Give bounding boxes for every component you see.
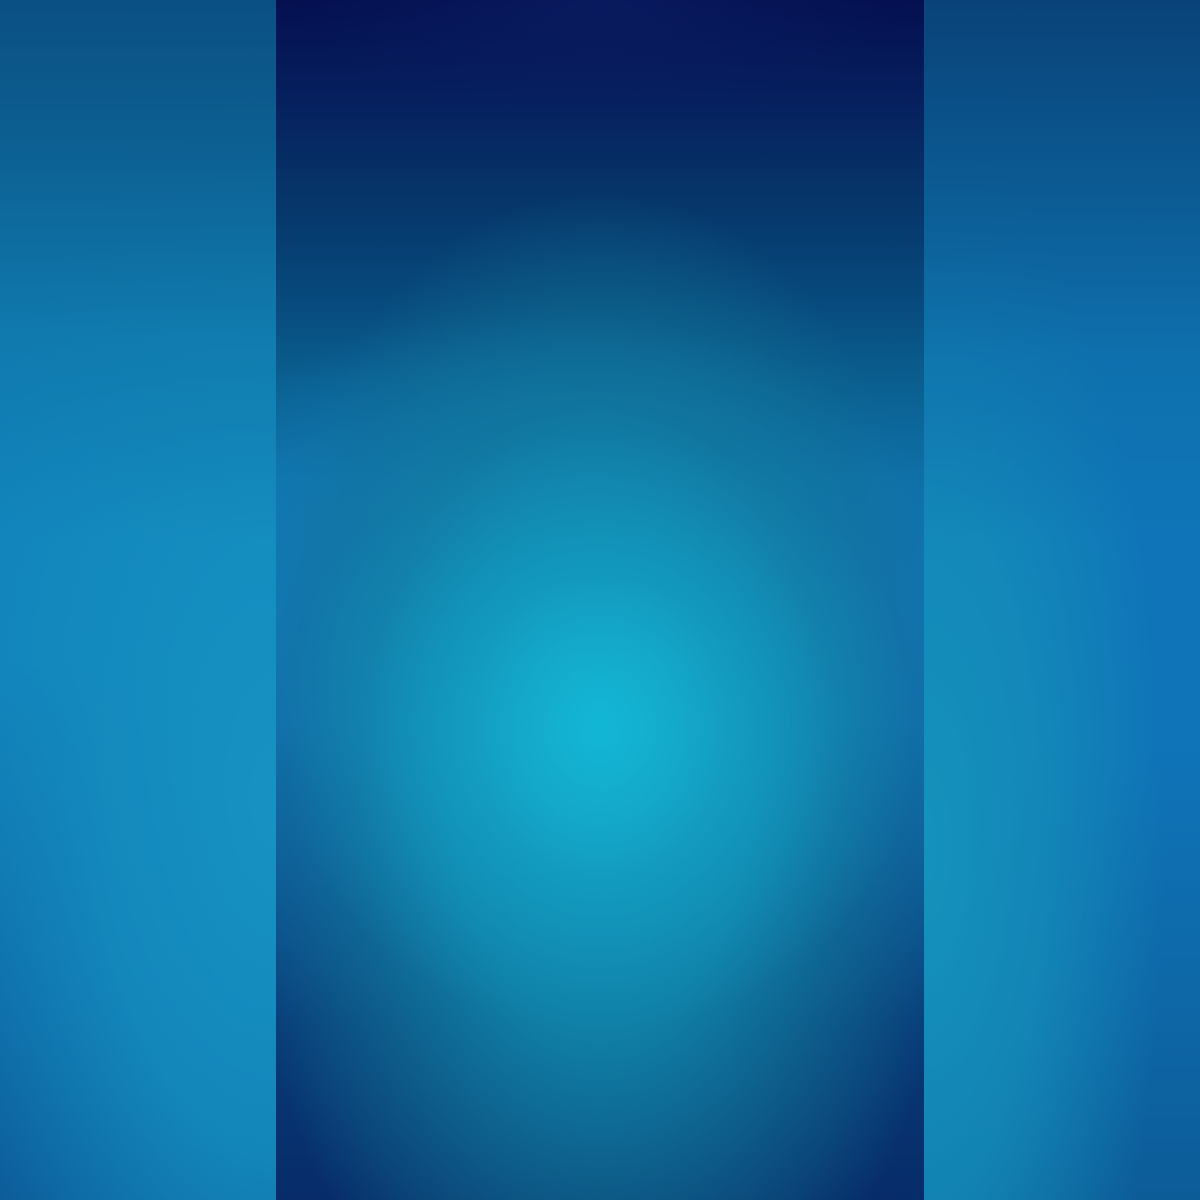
panel: center gradient column with radial glow	[276, 0, 924, 1200]
panel: left gradient column	[0, 0, 276, 1200]
panel: right gradient column	[924, 0, 1200, 1200]
